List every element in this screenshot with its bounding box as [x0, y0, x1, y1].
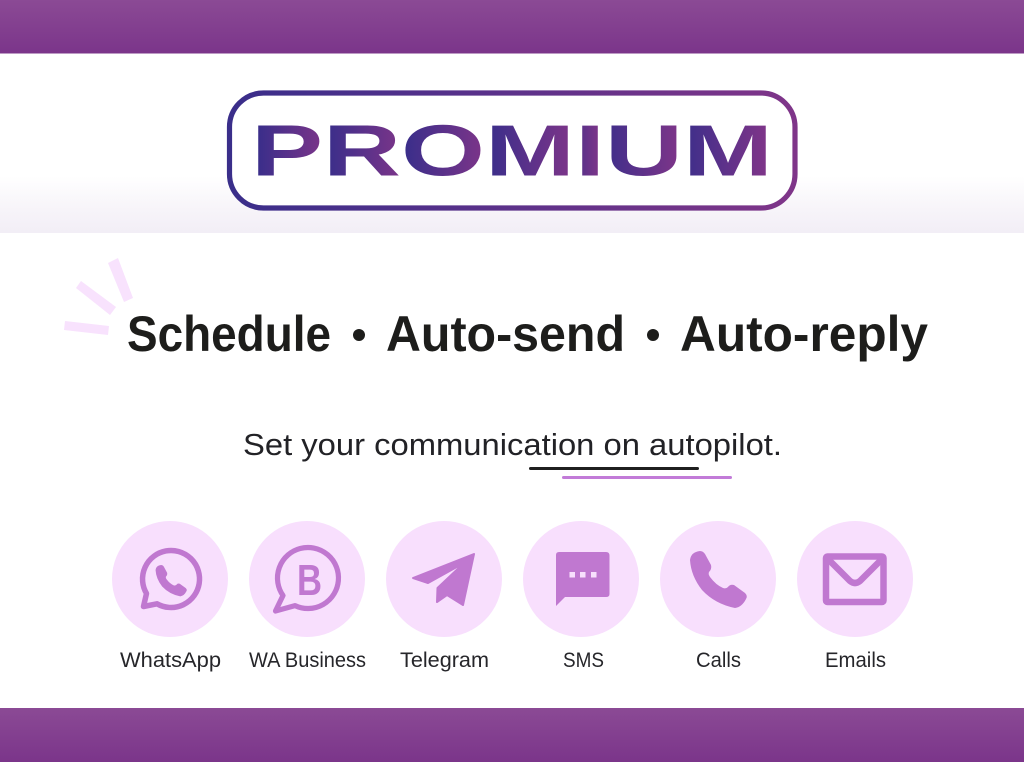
channel: Calls — [660, 521, 776, 672]
icon: paper plane — [413, 554, 474, 605]
label: Telegram — [400, 649, 489, 672]
black underline — [529, 467, 699, 470]
channel: Telegram — [386, 521, 502, 672]
icon: envelope — [826, 556, 884, 602]
tagline: Set your communication on autopilot. — [243, 427, 782, 462]
icon: WhatsApp — [143, 550, 200, 607]
circle — [249, 521, 365, 637]
label: SMS — [563, 649, 604, 672]
logo backdrop fade — [0, 176, 1024, 233]
channel: WhatsApp — [112, 521, 228, 672]
circle — [797, 521, 913, 637]
channel: WA Business — [249, 521, 366, 672]
headline: Auto-send: Auto-send — [386, 306, 625, 362]
headline — [127, 306, 928, 362]
circle — [112, 521, 228, 637]
logo — [230, 93, 795, 208]
icon: WhatsApp Business — [276, 547, 338, 611]
headline: Schedule: Schedule — [127, 306, 331, 362]
logo wordmark: PROMIUM — [251, 111, 773, 191]
label: WhatsApp — [120, 649, 221, 672]
icon: phone handset — [690, 551, 747, 608]
circle — [386, 521, 502, 637]
label: WA Business — [249, 649, 366, 672]
headline: Auto-reply: Auto-reply — [680, 306, 928, 362]
circle — [523, 521, 639, 637]
top purple banner — [0, 0, 1024, 54]
accent rays — [64, 258, 133, 335]
logo frame — [230, 93, 795, 208]
label: Emails — [825, 649, 886, 672]
bottom purple banner — [0, 708, 1024, 762]
icon: WhatsApp Business: B — [297, 556, 322, 605]
channel: SMS — [523, 521, 639, 672]
bullet separator — [353, 329, 365, 341]
purple underline — [562, 476, 732, 479]
icon: message bubble — [556, 552, 610, 606]
label: Calls — [696, 649, 741, 672]
bullet separator — [647, 329, 659, 341]
circle — [660, 521, 776, 637]
channel: Emails — [797, 521, 913, 672]
